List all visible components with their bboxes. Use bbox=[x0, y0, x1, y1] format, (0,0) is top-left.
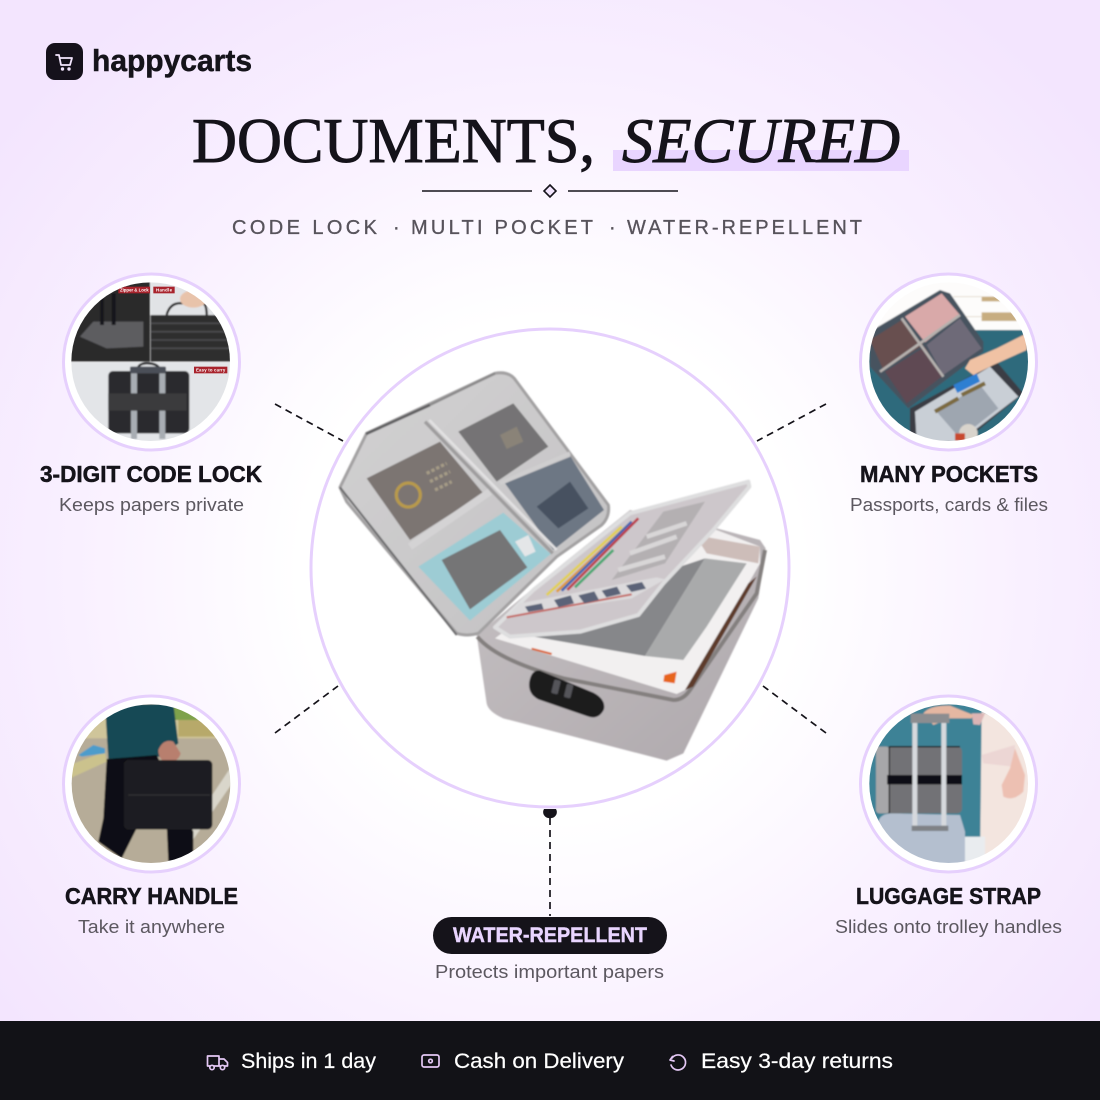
subtitle: · bbox=[393, 217, 400, 239]
connector dashed lines bbox=[275, 404, 826, 916]
thumbnail: code lock: Easy to carry bbox=[196, 368, 226, 373]
label: ships: Ships in 1 day bbox=[241, 1050, 377, 1073]
description: Passports, cards & files bbox=[850, 494, 1048, 515]
thumbnail: code lock: Zipper & Lock bbox=[120, 288, 149, 293]
pill heading bbox=[433, 917, 667, 954]
passport: top right bbox=[458, 403, 548, 482]
mesh sleeve bbox=[530, 558, 705, 656]
description: Slides onto trolley handles bbox=[835, 916, 1062, 937]
logo bbox=[46, 43, 252, 80]
feature: luggage strap bbox=[835, 696, 1062, 937]
label: cash: Cash on Delivery bbox=[454, 1050, 625, 1073]
description: Take it anywhere bbox=[78, 916, 225, 937]
feature: water-repellent bbox=[433, 917, 667, 982]
heading: LUGGAGE STRAP bbox=[856, 883, 1041, 909]
colored files bbox=[547, 518, 638, 595]
flap pocket bbox=[495, 482, 749, 637]
subtitle: · bbox=[609, 217, 616, 239]
footer bar bbox=[0, 1021, 1100, 1100]
document stack bbox=[495, 530, 760, 694]
lid dividers bbox=[425, 422, 553, 553]
icon: shopping cart bbox=[46, 43, 83, 80]
feature: many pockets bbox=[850, 274, 1048, 515]
title bbox=[192, 106, 909, 176]
thumbnail: luggage strap bbox=[860, 696, 1036, 872]
subtitle: CODE LOCK bbox=[232, 217, 378, 239]
product photo: open document organiser bbox=[340, 373, 766, 761]
main product circle bbox=[311, 329, 789, 807]
card strip bbox=[507, 577, 665, 617]
heading: CARRY HANDLE bbox=[65, 883, 238, 909]
card with car bbox=[505, 457, 604, 550]
title: SECURED bbox=[622, 106, 900, 176]
description: Protects important papers bbox=[435, 961, 664, 982]
icon: cash bbox=[422, 1055, 439, 1067]
base of case bbox=[477, 510, 766, 761]
orange label bbox=[663, 672, 677, 683]
title: DOCUMENTS, bbox=[192, 106, 595, 176]
icon: delivery truck bbox=[208, 1056, 228, 1070]
lid bbox=[340, 373, 609, 635]
blue card bbox=[418, 513, 551, 621]
pill heading: WATER-REPELLENT bbox=[453, 924, 647, 947]
heading: 3-DIGIT CODE LOCK bbox=[40, 461, 262, 487]
case zipper edge bbox=[477, 550, 765, 700]
mesh pocket strip bbox=[612, 502, 705, 580]
thumbnail: many pockets bbox=[860, 274, 1036, 450]
label: returns: Easy 3-day returns bbox=[701, 1050, 893, 1073]
passport: left bbox=[367, 442, 483, 540]
connector pin dot bbox=[543, 809, 557, 818]
subtitle: WATER-REPELLENT bbox=[627, 217, 862, 239]
thumbnail: code lock: Handle bbox=[156, 288, 173, 293]
thumbnail: carry handle bbox=[64, 696, 240, 872]
feature: carry handle bbox=[64, 696, 240, 937]
icon: returns bbox=[670, 1055, 686, 1070]
heading: MANY POCKETS bbox=[860, 461, 1038, 487]
divider with diamond bbox=[422, 185, 678, 197]
thumbnail: code lock bbox=[64, 274, 240, 450]
subtitle bbox=[232, 217, 862, 239]
brand name: happycarts bbox=[92, 43, 252, 78]
combination lock bbox=[529, 671, 604, 717]
feature: code lock bbox=[40, 274, 262, 515]
description: Keeps papers private bbox=[59, 494, 244, 515]
subtitle: MULTI POCKET bbox=[411, 217, 593, 239]
